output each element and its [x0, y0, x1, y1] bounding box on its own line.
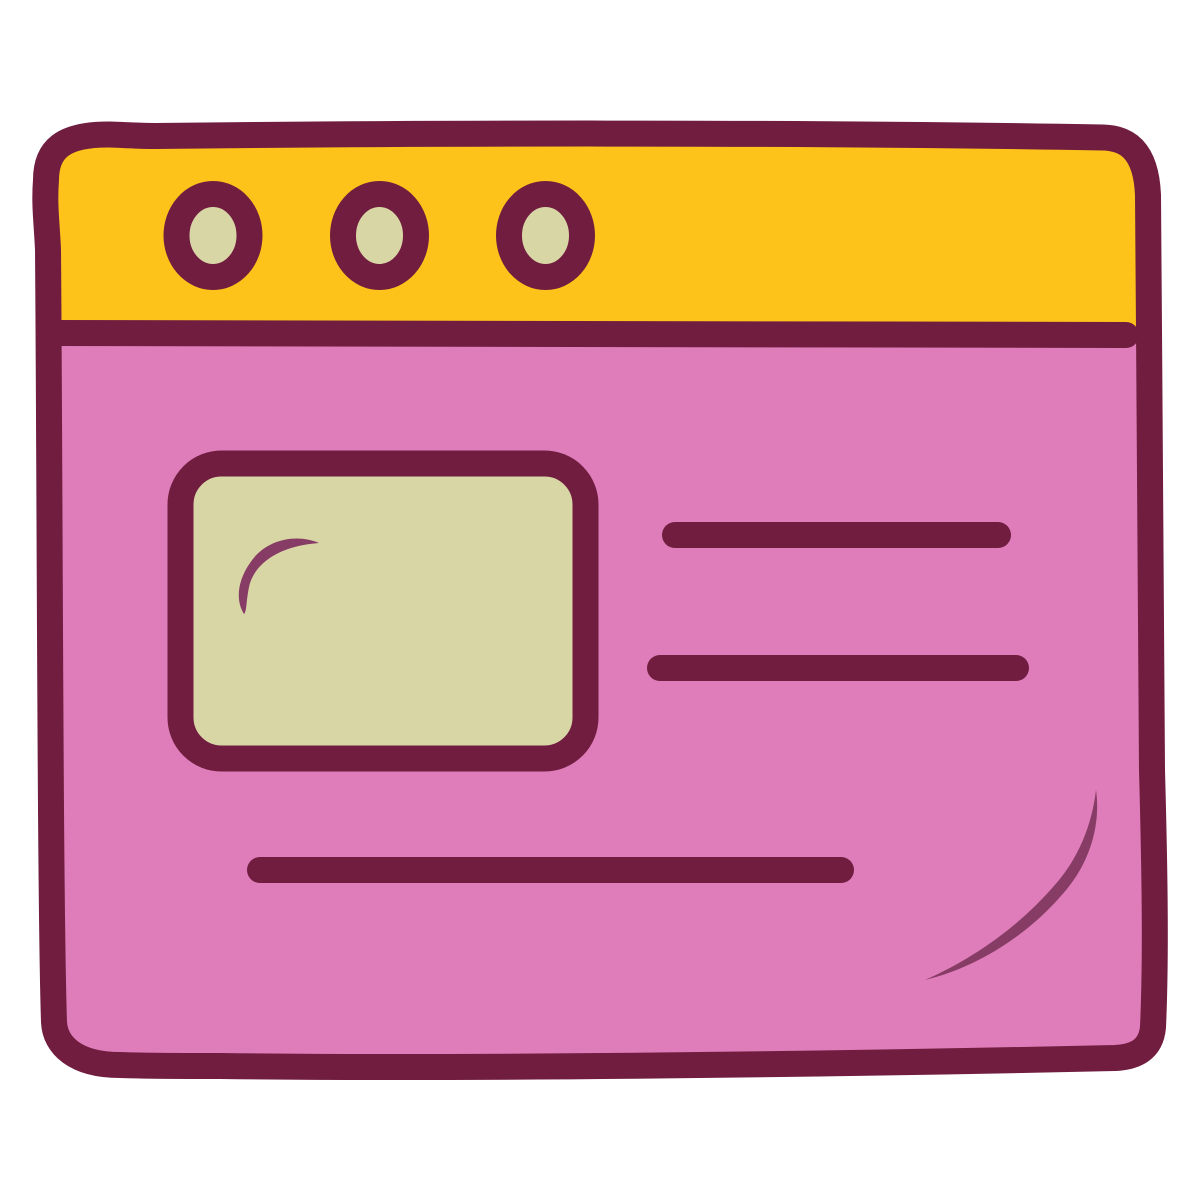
icon: window control 1 [176, 194, 250, 277]
panel: window body [49, 334, 1155, 1067]
image placeholder [180, 464, 586, 758]
text line 2 [647, 655, 1029, 681]
image highlight [239, 539, 319, 614]
text line 3 [247, 857, 854, 883]
panel: title bar [45, 134, 1149, 334]
text line 1 [662, 522, 1011, 548]
title bar divider [52, 333, 1126, 335]
icon: window control 2 [343, 194, 416, 277]
window highlight [925, 790, 1097, 980]
icon: window control 3 [509, 194, 582, 277]
window outline [45, 134, 1155, 1067]
